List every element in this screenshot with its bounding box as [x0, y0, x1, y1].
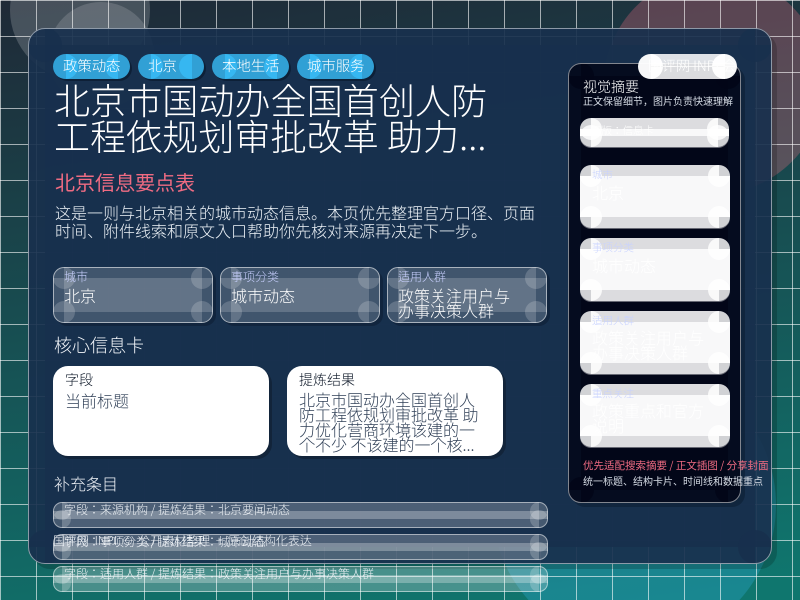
side card: 适用人群: 办事决策人群 [592, 340, 688, 364]
info card: 字段 [53, 366, 269, 456]
tag: 北京: 北京 [148, 55, 177, 76]
side card: 事项分类: 城市动态 [592, 253, 656, 277]
info card: 提炼结果: 防工程依规划审批改革 助 [299, 402, 479, 426]
info card: 字段: 字段 [65, 370, 93, 390]
summary text [55, 200, 535, 242]
stat card: 事项分类: 城市动态 [231, 283, 295, 307]
list row: 事项分类 [53, 533, 548, 560]
stat card: 适用人群: 适用人群 [398, 268, 446, 285]
tag: 北京 [138, 54, 206, 81]
side card: 版式 [580, 118, 729, 148]
side card: 适用人群 [580, 311, 730, 375]
info card: 字段: 当前标题 [65, 388, 129, 412]
info card: 提炼结果: 提炼结果 [299, 370, 355, 390]
tag: 政策动态 [53, 54, 132, 81]
heading: 补充条目: 补充条目 [54, 471, 118, 495]
stat card: 事项分类: 事项分类 [231, 268, 279, 285]
side card: 事项分类 [580, 238, 730, 302]
side panel caption: note: 统一标题、结构卡片、时间线和数据重点 [583, 473, 763, 488]
info card: 提炼结果: 力优化营商环境该建的一 [299, 417, 475, 441]
side card: 重点关注: 重点关注 [592, 386, 634, 401]
side card: 重点关注: 说明 [592, 413, 624, 437]
stat card: 适用人群: 办事决策人群 [398, 298, 494, 322]
side panel subheading: 正文保留细节，图片负责快速理解 [583, 93, 733, 108]
list row: 适用人群: 字段：适用人群 / 提炼结果：政策关注用户与办事决策人群 [64, 565, 374, 582]
stat card: 城市: 北京 [64, 283, 96, 307]
info card: 提炼结果: 个不少 不该建的一个核... [299, 432, 475, 456]
side card: 版式: 图版：信息卡 [591, 123, 654, 138]
subtitle: 北京信息要点表 [55, 167, 195, 196]
side panel heading: 视觉摘要 [583, 77, 639, 97]
side panel caption: usage: 优先适配搜索摘要 / 正文插图 / 分享封面 [583, 458, 769, 473]
stat card: 城市: 城市 [64, 268, 88, 285]
side card: 重点关注 [580, 384, 730, 448]
stat card: 城市 [53, 267, 216, 326]
stat card: 适用人群 [387, 267, 550, 326]
tag: 本地生活: 本地生活 [222, 55, 280, 76]
info card: 提炼结果 [287, 366, 503, 456]
side panel: visual summary [568, 63, 745, 507]
side card: 城市: 城市 [592, 167, 613, 182]
side card: 适用人群: 适用人群 [592, 313, 634, 328]
side card: 重点关注: 政策重点和官方 [592, 398, 704, 422]
title: 工程依规划审批改革 助力... [54, 109, 486, 161]
footer source note: 国评网 INPI © 公开素材整理 + 原创结构化表达 [53, 532, 312, 549]
side card: 适用人群: 政策关注用户与 [592, 325, 704, 349]
list row: 适用人群 [53, 565, 548, 592]
list row: 来源机构: 字段：来源机构 / 提炼结果：北京要闻动态 [64, 501, 290, 518]
list row: 来源机构 [53, 501, 548, 528]
tag: 本地生活 [212, 54, 291, 81]
summary text: 时间、附件线索和原文入口帮助你先核对来源再决定下一步。 [55, 218, 487, 242]
list row: 事项分类: 字段：事项分类 / 提炼结果：城市动态 [64, 533, 266, 550]
info card: 提炼结果: 北京市国动办全国首创人 [299, 387, 475, 411]
title: 北京市国动办全国首创人防 [54, 73, 487, 125]
tag: 城市服务: 城市服务 [307, 55, 365, 76]
source pill: 国评网 INPI 会 [648, 56, 736, 76]
tag: 政策动态: 政策动态 [63, 55, 121, 76]
tag: 城市服务 [297, 54, 376, 81]
stat card: 事项分类 [220, 267, 383, 326]
heading: 核心信息卡: 核心信息卡 [54, 332, 144, 358]
stat card: 适用人群: 政策关注用户与 [398, 283, 510, 307]
side card: 城市: 北京 [592, 180, 624, 204]
summary text: 这是一则与北京相关的城市动态信息。本页优先整理官方口径、页面 [55, 200, 535, 224]
title [54, 73, 487, 161]
side card: 城市 [580, 165, 730, 229]
side card: 事项分类: 事项分类 [592, 240, 634, 255]
